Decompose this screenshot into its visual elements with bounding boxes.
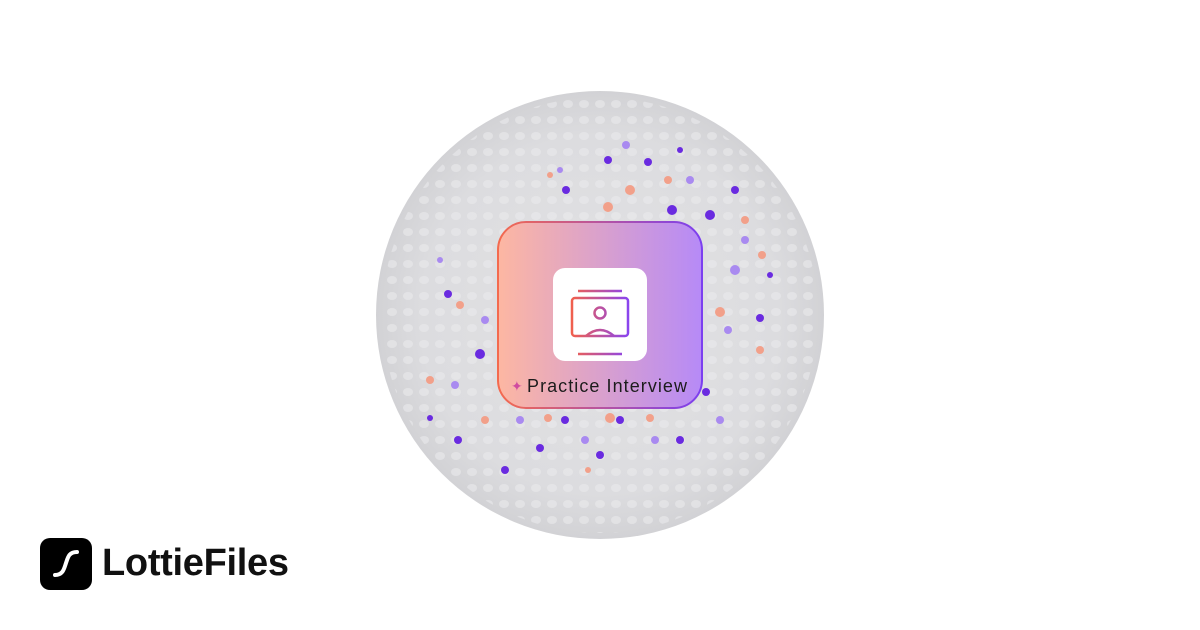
sphere with dots — [376, 91, 824, 539]
label: ✦ — [511, 378, 523, 394]
icon tile — [553, 268, 647, 361]
logo: LottieFiles — [40, 538, 289, 590]
card: Practice Interview: Practice Interview — [527, 376, 688, 396]
card: Practice Interview — [497, 221, 703, 409]
icon: lottie mark — [40, 538, 92, 590]
logo: LottieFiles: LottieFiles — [102, 542, 289, 584]
